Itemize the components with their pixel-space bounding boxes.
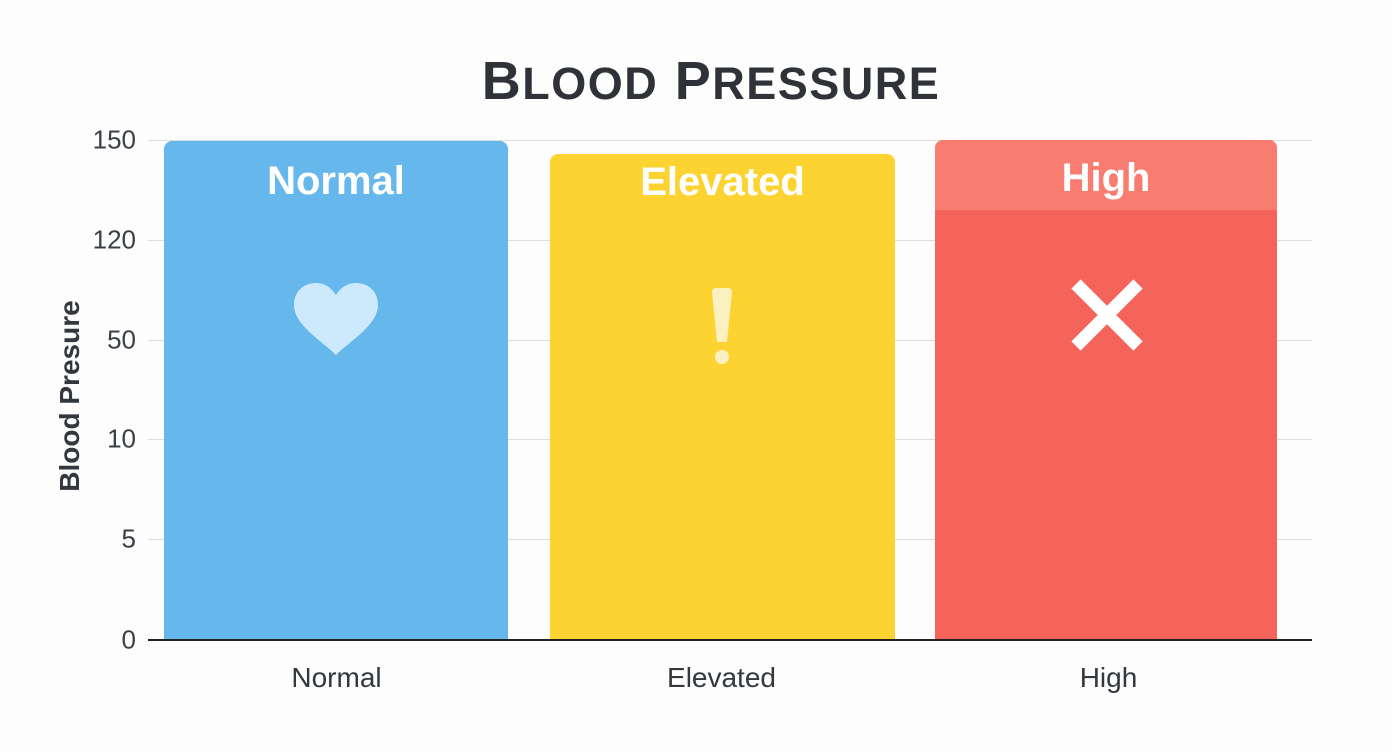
title: BLOOD PRESSURE	[482, 51, 940, 111]
bar: elevated: Elevated	[640, 160, 805, 204]
icon: heart	[294, 283, 378, 355]
y axis labels: 150	[93, 124, 136, 154]
bar: normal	[164, 141, 508, 640]
bar: high	[935, 140, 1277, 640]
icon: exclamation	[712, 288, 732, 364]
y axis labels: 50	[107, 324, 136, 354]
bar: normal: Normal	[267, 159, 405, 203]
y axis title: Blood Presure	[54, 300, 85, 492]
x labels: Normal	[291, 662, 382, 693]
y axis labels: 10	[107, 424, 136, 454]
y axis labels: 120	[93, 224, 136, 254]
y axis labels	[93, 124, 136, 654]
bar: high: High	[1062, 156, 1150, 200]
x labels: High	[1080, 662, 1137, 693]
y axis labels: 5	[122, 524, 136, 554]
baseline	[148, 639, 1312, 641]
bar: elevated	[550, 154, 895, 640]
icon: cross	[1072, 279, 1142, 351]
x labels: Elevated	[667, 662, 776, 693]
y axis labels: 0	[122, 624, 136, 654]
